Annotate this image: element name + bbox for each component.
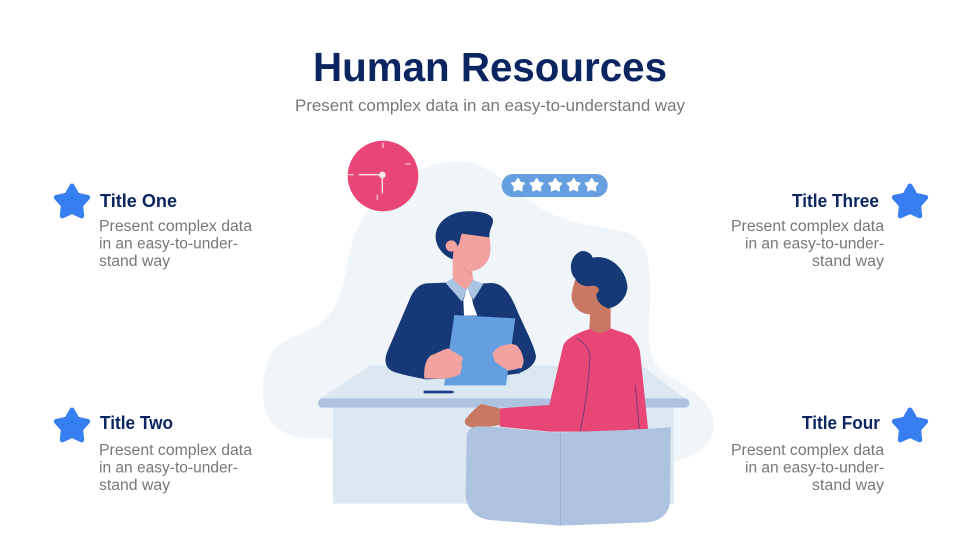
suit <box>385 283 536 379</box>
interviewer figure <box>385 211 536 385</box>
hair <box>436 211 493 259</box>
text block: Title Three description: stand way <box>812 253 884 270</box>
text block: Title Three description: in an easy-to-under- <box>745 236 884 252</box>
sweater <box>500 328 648 432</box>
collar <box>445 278 483 302</box>
text block: Title Three description <box>731 218 884 270</box>
icon: star three <box>894 186 926 216</box>
panel: Title Four <box>731 410 926 494</box>
text block: Title One description: Present complex data <box>99 218 252 235</box>
left hand <box>424 348 463 379</box>
armchair <box>466 426 671 526</box>
panel: Title Three <box>731 186 926 270</box>
text block: Title Three description: Present complex data <box>731 218 884 235</box>
candidate figure <box>465 251 648 432</box>
panel: Title Two <box>56 410 252 494</box>
desk <box>318 366 689 504</box>
heading: Title Three: Title Three <box>792 191 879 211</box>
text block: Title One description: in an easy-to-under- <box>99 236 238 252</box>
icon: star one <box>56 186 88 216</box>
icon: star two <box>56 410 88 440</box>
hair <box>571 251 627 308</box>
icon: wall clock <box>348 141 418 211</box>
heading: Title Two: Title Two <box>100 413 173 433</box>
clipboard <box>444 315 515 385</box>
subtitle: Present complex data in an easy-to-understand way <box>295 96 685 115</box>
neck and face <box>572 280 611 333</box>
cuff <box>517 368 523 374</box>
text block: Title Four description: in an easy-to-under- <box>745 460 884 476</box>
tie <box>463 288 477 316</box>
text block: Title Two description <box>99 442 252 494</box>
text block: Title Two description: stand way <box>99 477 170 494</box>
text block: Title Four description: Present complex data <box>731 442 884 459</box>
illustration: HR interview <box>263 141 714 526</box>
right hand <box>492 344 524 371</box>
icon: star four <box>894 410 926 440</box>
rating badge with five stars <box>502 174 608 197</box>
heading: Title Four: Title Four <box>802 413 880 433</box>
heading: Title One: Title One <box>100 191 177 211</box>
text block: Title Two description: in an easy-to-under- <box>99 460 238 476</box>
background blob <box>263 162 714 463</box>
text block: Title One description <box>99 218 252 270</box>
text block: Title One description: stand way <box>99 253 170 270</box>
text block: Title Two description: Present complex data <box>99 442 252 459</box>
neck and head <box>452 230 490 289</box>
hand <box>465 404 500 428</box>
text block: Title Four description: stand way <box>812 477 884 494</box>
text block: Title Four description <box>731 442 884 494</box>
title: Human Resources <box>313 44 667 90</box>
panel: Title One <box>56 186 252 270</box>
